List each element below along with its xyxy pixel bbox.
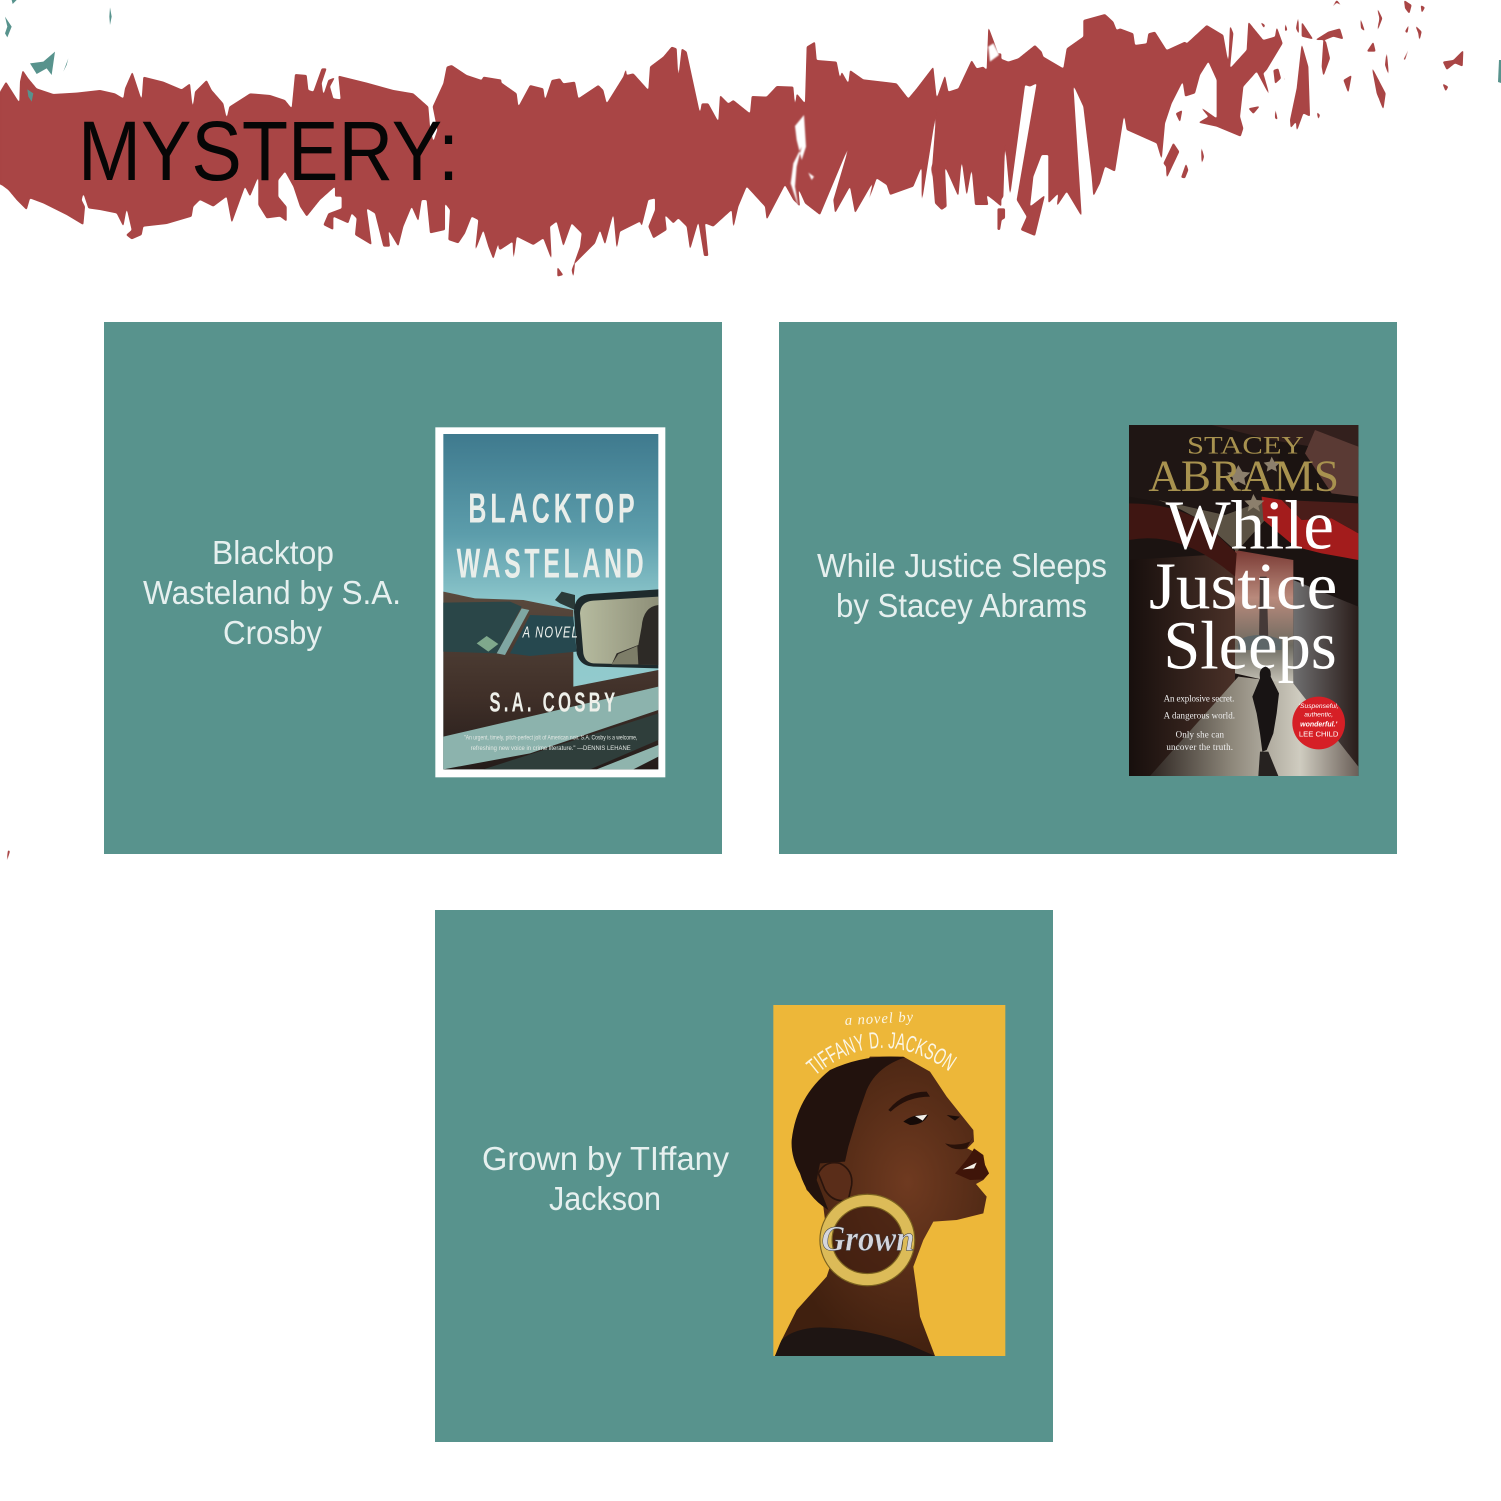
book cover: While Justice Sleeps: A dangerous world.	[1164, 711, 1235, 721]
title: MYSTERY:	[78, 104, 459, 198]
book cover: Blacktop Wasteland: S.A. COSBY	[489, 686, 618, 718]
book cover: While Justice Sleeps: wonderful.'	[1300, 721, 1337, 728]
book cover: Grown: TIFFANY D. JACKSON	[805, 1032, 958, 1074]
caption: Grown: Grown by TIffany	[482, 1140, 729, 1177]
book cover: While Justice Sleeps: uncover the truth.	[1166, 742, 1233, 752]
book cover: While Justice Sleeps: While	[1166, 488, 1334, 565]
caption: Blacktop Wasteland: Blacktop	[212, 534, 334, 571]
panel: Blacktop Wasteland	[104, 322, 722, 854]
teal paint splatters	[5, 0, 1501, 102]
book cover: While Justice Sleeps: 'Suspenseful,	[1299, 703, 1339, 710]
brush stroke banner	[0, 0, 1477, 865]
panel: Grown	[435, 910, 1053, 1442]
caption: Blacktop Wasteland: Wasteland by S.A.	[143, 574, 401, 611]
book cover: While Justice Sleeps: LEE CHILD	[1299, 730, 1339, 739]
book cover: While Justice Sleeps: authentic,	[1304, 712, 1333, 719]
book cover: While Justice Sleeps	[1129, 425, 1358, 776]
book cover: Grown	[773, 1005, 1006, 1356]
panel: While Justice Sleeps	[779, 322, 1397, 854]
book cover: While Justice Sleeps: ABRAMS	[1148, 452, 1339, 501]
book cover: Blacktop Wasteland: "An urgent, timely, pitch-perfect jolt of American noir. S.A. Cosby is a welcome,	[464, 734, 637, 741]
book cover: Blacktop Wasteland: A NOVEL	[522, 622, 579, 641]
book cover: Blacktop Wasteland: refreshing new voice in crime literature." —DENNIS LEHANE	[471, 745, 631, 752]
book cover: While Justice Sleeps: Justice	[1149, 551, 1337, 624]
caption: Grown: Jackson	[549, 1180, 661, 1217]
book cover: Grown: Grown	[822, 1219, 914, 1259]
book cover: Blacktop Wasteland: WASTELAND	[457, 541, 647, 587]
book cover: While Justice Sleeps: Only she can	[1176, 729, 1224, 739]
book cover: While Justice Sleeps: An explosive secret.	[1164, 693, 1234, 703]
caption: Blacktop Wasteland: Crosby	[223, 614, 322, 651]
book cover: While Justice Sleeps: Sleeps	[1163, 607, 1337, 683]
book cover: Blacktop Wasteland: BLACKTOP	[468, 486, 639, 532]
book cover: While Justice Sleeps: STACEY	[1187, 431, 1304, 459]
caption: While Justice Sleeps: While Justice Sleeps	[817, 547, 1107, 584]
caption: Grown	[482, 1140, 729, 1217]
caption: While Justice Sleeps: by Stacey Abrams	[836, 587, 1087, 624]
caption: Blacktop Wasteland	[143, 534, 401, 651]
book cover: Grown: a novel by	[844, 1009, 914, 1029]
caption: While Justice Sleeps	[817, 547, 1107, 624]
book cover: Blacktop Wasteland	[435, 427, 665, 777]
